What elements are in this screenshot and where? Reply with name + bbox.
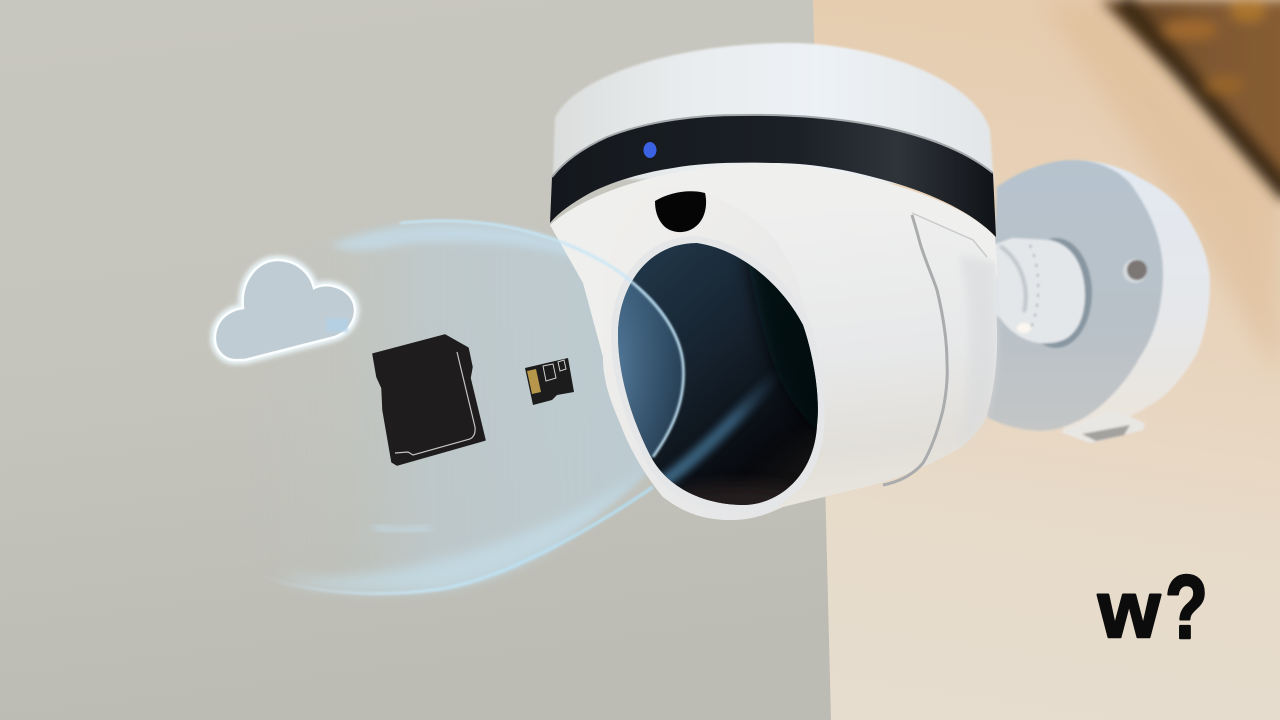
mount: collar shadow ring [1020,238,1092,348]
text: w? label: ? [1165,558,1208,658]
cowl around lens [603,188,824,520]
lens light streak [660,376,775,486]
camera dome top [553,43,994,185]
lens blue reflection from bubble [618,282,684,458]
camera lens [618,243,818,505]
mount: screw hole [1123,259,1147,283]
bubble edge over camera [260,221,684,593]
icon: microSD card [525,358,574,405]
bubble upper edge [400,221,684,457]
text: w? label: w [1097,565,1161,654]
camera lower collar [550,163,998,420]
lens bezel ring [611,236,825,512]
camera collar inner line [912,213,987,257]
mount: bottom clip [1060,410,1145,443]
bubble lower edge [260,487,653,593]
body right shading [957,255,997,450]
bubble inner corner glow [374,526,430,531]
camera band thin highlight [552,115,993,177]
storage bubble on wall [225,221,690,594]
lens warm bottom [678,480,789,505]
icon: SD card [373,335,485,465]
text: w? label [1097,558,1208,658]
background: blurred wooden beam [1100,0,1280,225]
icon: blue status LED [644,142,656,158]
mount: connector arm [990,238,1085,343]
background: warm shading near beam [1040,0,1280,380]
camera black band [550,115,996,237]
background wall: left grey [0,0,840,720]
bubble fill [225,221,690,594]
mount: front disc [987,160,1163,431]
mount: back disc rim [1063,160,1210,433]
camera seam line [883,215,947,485]
mount: wall bracket [987,160,1210,443]
bubble lower soft glow [280,470,650,592]
bubble top soft glow [330,225,620,270]
small dome sensor [655,191,706,232]
lens dark right side [739,258,818,438]
camera body [603,210,997,520]
icon: glowing cloud [215,260,355,360]
background wall: right beige [813,0,1280,720]
